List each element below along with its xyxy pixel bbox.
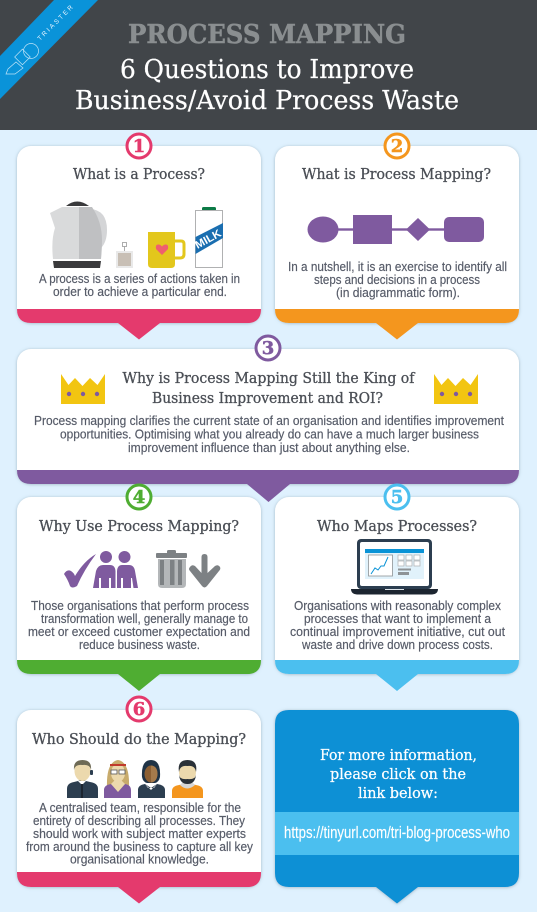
heading [122,371,416,407]
process flow diagram [308,215,484,244]
link band [275,812,519,855]
panel: more information call to action [275,710,519,904]
body text: opportunities. Optimising what you already do can have a much larger business [60,426,479,442]
badge 6 [127,697,151,721]
body text: Those organisations that perform process [31,598,249,613]
body text: In a nutshell, it is an exercise to identify all [288,259,507,274]
body text [28,598,250,652]
body text [39,271,240,299]
body text: reduce business waste. [79,637,200,652]
body text: meet or exceed customer expectation and [28,624,250,639]
body text: should work with subject matter experts [33,826,246,841]
body text: steps and decisions in a process [314,272,480,287]
body text: Organisations with reasonably complex [294,598,501,613]
icon: two people [93,551,138,588]
title: Business/Avoid Process Waste [75,85,459,116]
ribbon: Triaster logo [0,0,98,99]
call to action text: link below: [358,786,438,802]
body text [34,413,504,455]
panel 5: Who Maps Processes [275,485,519,691]
call to action text: For more information, [320,748,477,764]
panel 4: Why Use Process Mapping [17,485,261,691]
body text: order to achieve a particular end. [53,284,227,299]
badge 1: 1 [133,136,145,157]
title: 6 Questions to Improve [120,54,414,85]
heading: Why Use Process Mapping? [39,519,239,535]
badge 2: 2 [391,136,403,157]
body text [290,598,505,652]
badge 5: 5 [391,487,403,508]
body text: organisational knowledge. [70,852,209,866]
panel 3: Why is Process Mapping still King [17,336,519,502]
heading: What is Process Mapping? [302,167,491,183]
icon: milk carton: MILK [193,228,223,252]
call to action text [320,748,477,802]
person: woman with glasses [104,760,131,798]
panel 1: What is a Process [17,134,261,340]
body text: A centralised team, responsible for the [39,800,241,815]
heading: Why is Process Mapping Still the King of [122,371,416,387]
icon: left crown [61,374,105,404]
title: PROCESS MAPPING [128,20,406,50]
body text: A process is a series of actions taken in [39,271,240,286]
icon: down arrow [189,554,220,588]
body text: improvement influence than just about anything else. [128,440,410,455]
heading: Business Improvement and ROI? [152,391,383,407]
icon: check mark [64,554,96,588]
title [75,20,459,116]
body text [26,800,253,866]
icon: four team members [67,760,203,798]
heading: Who Should do the Mapping? [32,732,246,748]
panel 2: What is Process Mapping [275,134,519,340]
person: woman with dark hair [138,760,165,798]
icon: laptop [351,539,438,594]
panel 6: Who Should do the Mapping [17,697,261,904]
badge 2 [385,134,409,158]
body text: (in diagrammatic form). [336,285,460,300]
heading: Who Maps Processes? [317,519,477,535]
badge 4 [127,485,151,509]
ribbon: Triaster logo: TRIASTER [36,4,75,42]
heading: What is a Process? [73,167,205,183]
body text: continual improvement initiative, cut out [290,624,505,639]
body text: entirety of describing all processes. They [33,813,245,828]
person: man with headset [67,760,98,798]
body text: transformation well, generally manage to [41,611,248,626]
icon: kettle [50,202,107,268]
person: bearded man in orange [172,760,203,798]
icon: waste bin [156,550,187,588]
body text: Process mapping clarifies the current state of an organisation and identifies improvement [34,413,504,428]
body text: from around the business to capture all key [26,839,253,854]
call to action text: please click on the [330,767,466,783]
icon: milk carton [193,207,223,268]
badge 1 [127,134,151,158]
badge 3: 3 [262,338,274,359]
body text: waste and drive down process costs. [301,637,493,652]
badge 3 [256,336,280,360]
badge 6: 6 [133,699,145,720]
icon: tea bag [116,242,133,268]
body text: processes that want to implement a [304,611,492,626]
icon: right crown [434,374,478,404]
body text [288,259,507,300]
header banner [0,0,537,130]
icon: mug [148,232,184,268]
badge 4: 4 [133,487,145,508]
badge 5 [385,485,409,509]
